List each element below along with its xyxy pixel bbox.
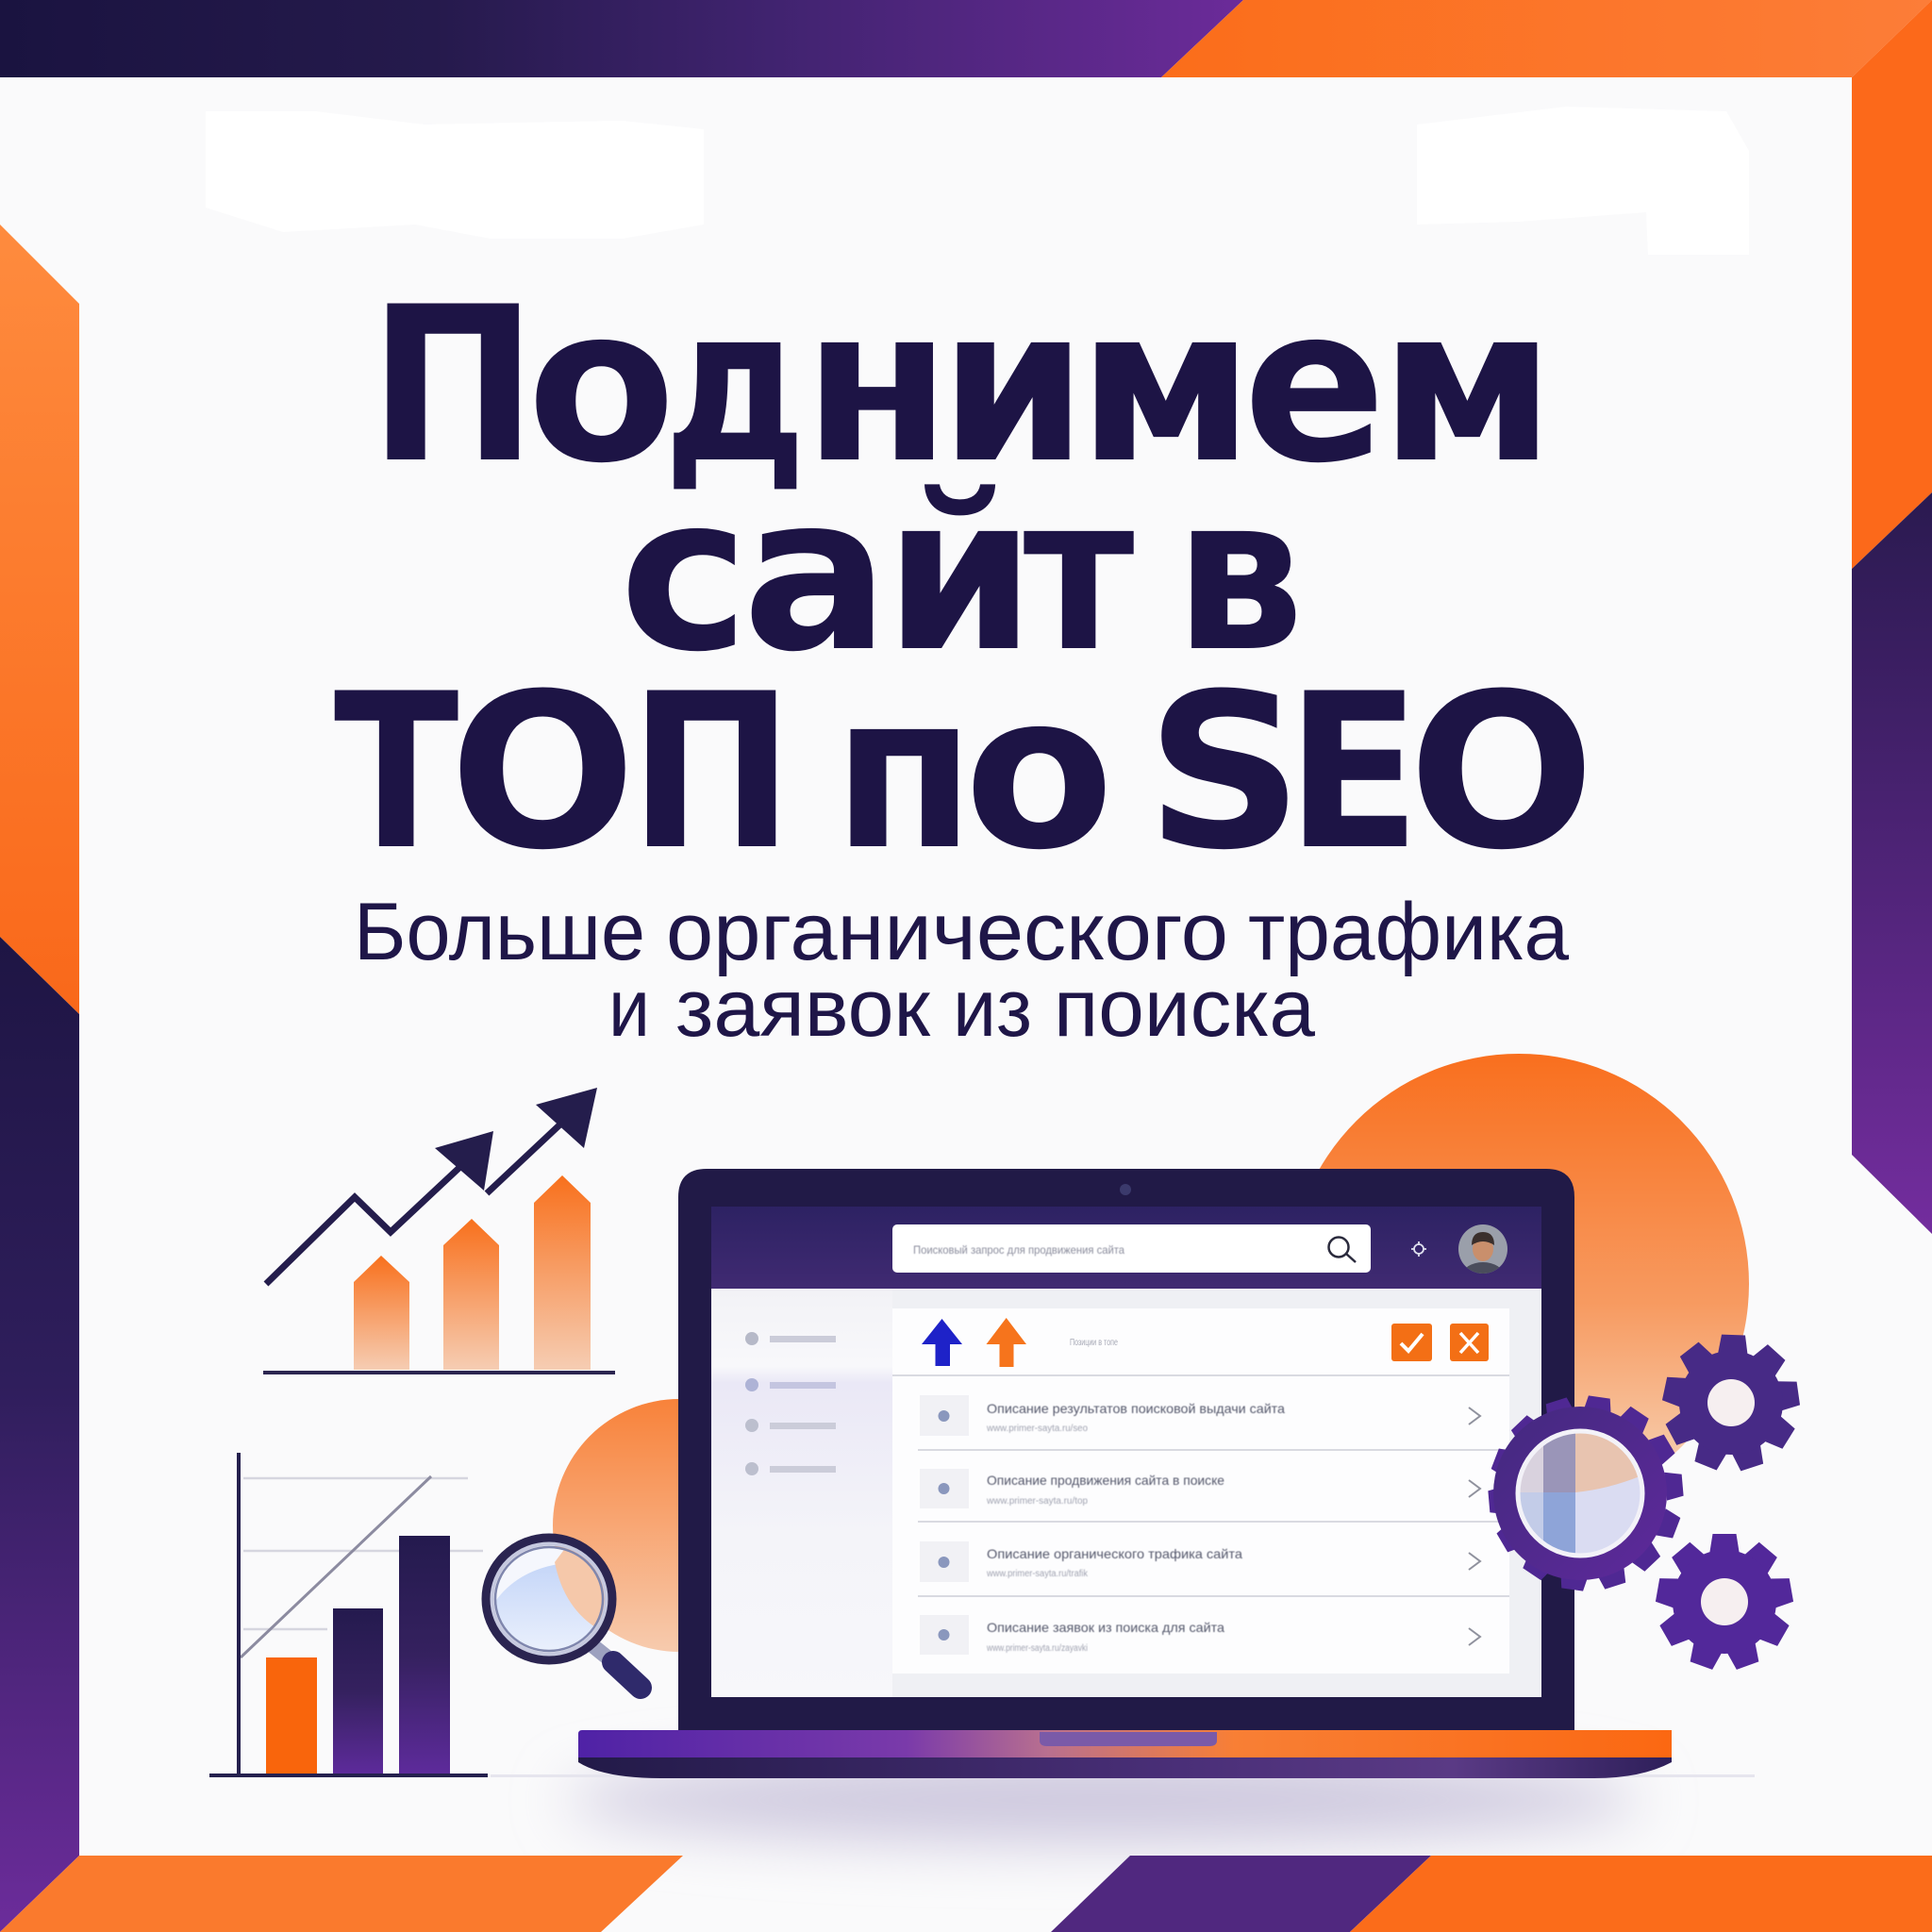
handle neck — [589, 1642, 613, 1662]
avatar hair — [1472, 1232, 1494, 1245]
subtitle: поиска — [1054, 963, 1315, 1054]
trend line 2 — [487, 1121, 564, 1193]
orange bar — [266, 1657, 317, 1775]
result row 1: www.primer-sayta.ru/seo — [986, 1424, 1088, 1434]
sidebar item 3 — [745, 1419, 836, 1432]
divider lines — [892, 1375, 1509, 1596]
result row 2 — [920, 1469, 1480, 1508]
bar 1 — [354, 1256, 409, 1370]
title: П — [629, 647, 793, 897]
title: н — [804, 260, 951, 510]
camera — [1120, 1184, 1131, 1195]
title: П — [369, 260, 538, 510]
subtitle: заявок — [675, 963, 931, 1054]
result row 3 — [920, 1541, 1480, 1582]
arrow head 2 — [536, 1088, 597, 1148]
small label: Позиции в топе — [1070, 1338, 1118, 1348]
frame: left band orange — [0, 225, 79, 1014]
button: cross — [1450, 1324, 1489, 1361]
pie chart — [1521, 1434, 1640, 1553]
title: O — [1408, 647, 1595, 897]
bar 2 — [443, 1219, 499, 1370]
pie ring — [1518, 1431, 1642, 1556]
title: й — [884, 449, 1036, 699]
title: м — [1379, 260, 1555, 510]
laptop — [578, 1169, 1672, 1778]
icon: blue up arrow — [922, 1319, 962, 1366]
search bar — [892, 1224, 1371, 1273]
result row 3: www.primer-sayta.ru/trafik — [986, 1569, 1089, 1579]
avatar face — [1473, 1241, 1493, 1261]
axes — [209, 1453, 488, 1775]
gear teeth — [1661, 1334, 1801, 1472]
title: м — [1077, 260, 1254, 510]
title: о — [526, 260, 675, 510]
gear teeth — [1488, 1395, 1684, 1591]
button: check — [1391, 1324, 1432, 1361]
title — [334, 260, 1595, 897]
laptop base lower — [578, 1755, 1672, 1778]
title: т — [1024, 449, 1135, 699]
subtitle: трафика — [1248, 887, 1569, 977]
handle — [613, 1662, 641, 1688]
bar 3 — [534, 1175, 591, 1370]
avatar — [1458, 1224, 1507, 1274]
frame: bottom band purple — [1051, 1856, 1431, 1932]
white patch: top left — [206, 111, 704, 239]
subtitle — [354, 887, 1569, 1054]
gear body — [1493, 1407, 1667, 1580]
title: а — [742, 449, 890, 699]
result row 3: Описание органического трафика сайта — [987, 1546, 1242, 1561]
icon: large gear with pie — [1488, 1395, 1684, 1591]
frame: right band orange — [1852, 0, 1932, 569]
title: E — [1286, 647, 1421, 897]
sidebar — [711, 1289, 892, 1697]
gear hole — [1701, 1578, 1748, 1625]
chart: bar chart with axes — [209, 1453, 488, 1775]
result row 4 — [920, 1615, 1480, 1655]
baseline — [263, 1371, 615, 1374]
title: п — [833, 647, 974, 897]
frame: left band purple — [0, 937, 79, 1932]
lens inner edge — [495, 1547, 603, 1651]
laptop lid — [678, 1169, 1574, 1730]
frame: top band orange — [1161, 0, 1932, 77]
chart: rising bars with arrow — [263, 1088, 615, 1374]
subtitle: органического — [666, 887, 1228, 977]
lens ring — [491, 1542, 608, 1656]
title: в — [1174, 449, 1305, 699]
frame: bottom band orange right — [1350, 1856, 1932, 1932]
result row 4: Описание заявок из поиска для сайта — [987, 1620, 1224, 1635]
purple bar — [333, 1608, 383, 1775]
search placeholder: Поисковый запрос для продвижения сайта — [913, 1243, 1124, 1257]
frame: bottom band orange left — [0, 1856, 683, 1932]
icon: small gear bottom — [1655, 1534, 1794, 1671]
orange circle: large behind laptop — [1289, 1054, 1749, 1514]
result row 2: Описание продвижения сайта в поиске — [987, 1473, 1224, 1488]
trend line — [266, 1163, 464, 1284]
frame: right band purple — [1852, 492, 1932, 1234]
lens glass — [494, 1546, 604, 1652]
floor shadow under laptop — [566, 1757, 1641, 1843]
title: е — [1243, 260, 1386, 510]
lens tint — [496, 1550, 602, 1649]
gear body — [1673, 1550, 1776, 1654]
sidebar item 2 — [745, 1378, 836, 1391]
title: и — [940, 260, 1087, 510]
icon: search — [1328, 1238, 1356, 1262]
title: О — [449, 647, 636, 897]
sidebar item 1 — [745, 1332, 836, 1345]
result row 1: Описание результатов поисковой выдачи сайта — [987, 1401, 1285, 1416]
icon: small settings — [1411, 1241, 1426, 1257]
result row 4: www.primer-sayta.ru/zayavki — [986, 1643, 1088, 1654]
lens rim — [486, 1538, 612, 1660]
subtitle: Больше — [354, 887, 645, 977]
grid lines — [243, 1478, 483, 1629]
title: S — [1146, 647, 1304, 897]
white patch: top right — [1417, 107, 1749, 255]
icon: small gear top — [1661, 1334, 1801, 1472]
orange circle: small behind laptop — [553, 1399, 806, 1652]
subtitle: из — [953, 963, 1032, 1054]
gear body — [1679, 1351, 1783, 1455]
result row 2: www.primer-sayta.ru/top — [986, 1496, 1088, 1507]
screen body — [711, 1289, 1541, 1697]
icon: orange up arrow — [987, 1318, 1026, 1367]
floor line — [491, 1774, 1755, 1777]
title: д — [664, 260, 807, 510]
sidebar item 4 — [745, 1462, 836, 1475]
laptop notch — [1040, 1732, 1217, 1746]
result row 1 — [920, 1395, 1480, 1436]
subtitle: и — [608, 963, 650, 1054]
laptop base top — [578, 1730, 1672, 1757]
avatar shoulders — [1466, 1262, 1500, 1274]
arrow head 1 — [435, 1131, 493, 1191]
trend line — [241, 1476, 431, 1657]
gear hole — [1707, 1379, 1755, 1426]
tall purple bar — [399, 1536, 450, 1775]
screen header — [711, 1207, 1541, 1289]
title: о — [964, 647, 1114, 897]
icon: magnifying glass — [486, 1538, 641, 1688]
title: с — [619, 449, 749, 699]
gear teeth — [1655, 1534, 1794, 1671]
title: Т — [334, 647, 458, 897]
frame: top band dark — [0, 0, 1243, 77]
content panel — [892, 1308, 1509, 1674]
